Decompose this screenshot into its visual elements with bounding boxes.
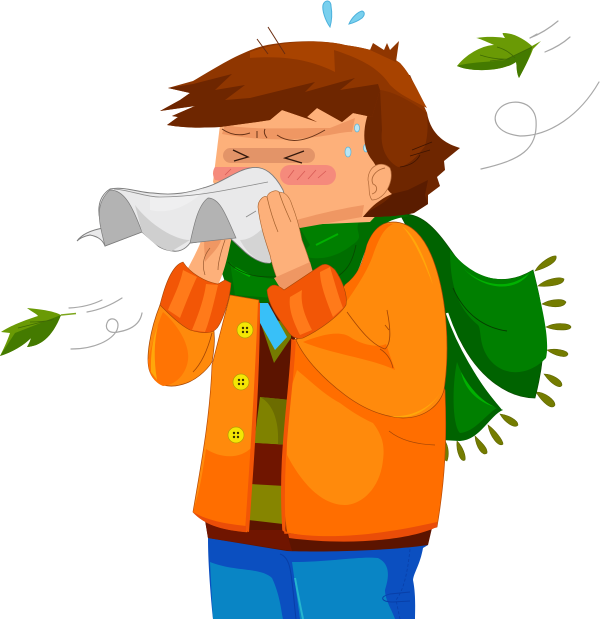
coat left sleeve xyxy=(148,305,214,386)
hair xyxy=(160,27,460,217)
hair fringe shadow xyxy=(160,74,380,128)
striped sweater xyxy=(247,300,295,530)
coat right sleeve xyxy=(296,222,447,418)
scarf fringe xyxy=(444,256,571,461)
scarf upper tail xyxy=(400,214,544,398)
squeezed eyes xyxy=(233,150,304,163)
jeans xyxy=(208,538,428,619)
leaf lower left xyxy=(0,308,76,356)
blush left xyxy=(213,167,252,185)
shaded eye band xyxy=(223,148,315,163)
wind lines lower left xyxy=(69,298,142,349)
hair main mass xyxy=(160,41,427,128)
coat xyxy=(148,222,447,542)
right cuff xyxy=(267,264,346,338)
buttons xyxy=(228,322,253,443)
sweat drops above head xyxy=(323,1,364,27)
tissue xyxy=(77,167,295,263)
scarf tail xyxy=(400,214,571,461)
scarf around neck xyxy=(222,214,410,303)
right hand xyxy=(258,191,313,291)
eyebrows xyxy=(222,129,325,140)
wind lines upper right xyxy=(481,21,599,169)
leaf upper right xyxy=(457,33,541,78)
sweat on face xyxy=(345,124,368,157)
coat right panel xyxy=(282,300,446,538)
hair back lobe xyxy=(363,75,460,217)
hair crown highlight xyxy=(250,42,427,108)
blush right xyxy=(280,165,336,185)
hair tuft strands xyxy=(370,41,399,62)
scarf lower tail xyxy=(438,290,503,441)
coat left placket xyxy=(245,302,260,532)
coat right placket xyxy=(282,340,295,533)
sweater hem xyxy=(205,520,432,551)
blue shirt collar xyxy=(259,303,287,350)
ear xyxy=(368,164,391,200)
coat left panel xyxy=(193,295,259,532)
left hand xyxy=(187,236,232,285)
face xyxy=(213,100,400,228)
left cuff xyxy=(160,262,231,333)
